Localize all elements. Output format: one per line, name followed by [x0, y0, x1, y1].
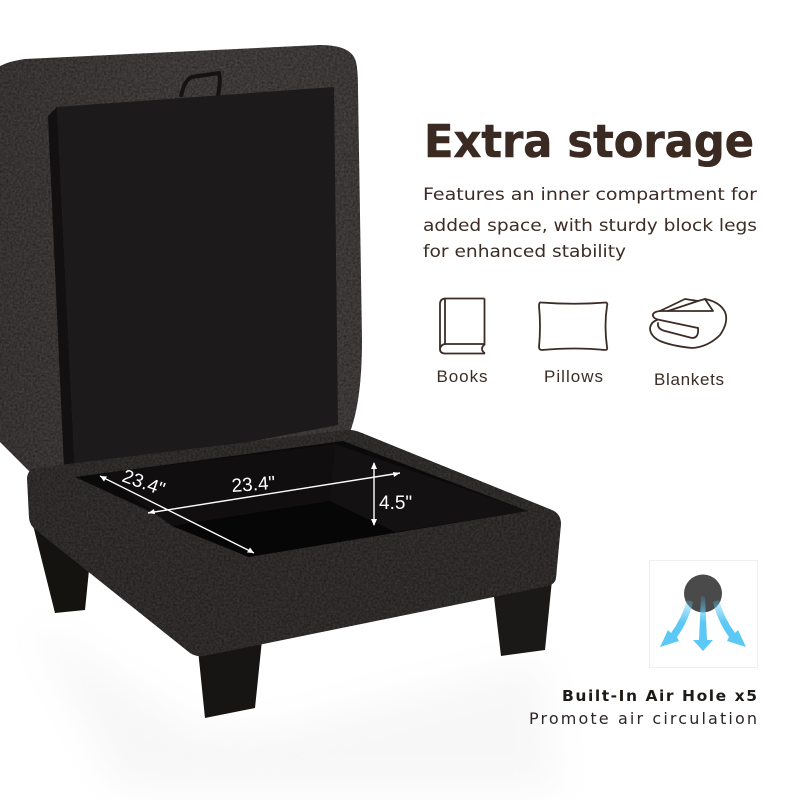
lid inner panel side strip [48, 107, 75, 475]
air hole caption heading: Built-In Air Hole x5 [562, 687, 757, 705]
icon: blanket [650, 299, 726, 348]
lid [0, 45, 362, 472]
dimension: width label: 23.4" [119, 466, 168, 501]
air hole caption text: Promote air circulation [529, 709, 757, 728]
airflow arrows [660, 596, 746, 651]
air hole circle [684, 574, 722, 612]
description: added space, with sturdy block legs [423, 216, 757, 236]
label: blankets: Blankets [654, 370, 724, 389]
icon: book [440, 298, 485, 354]
back-right leg [492, 570, 553, 656]
dimension: width arrow [100, 476, 254, 553]
storage opening [75, 441, 528, 557]
lid inner panel [57, 87, 338, 475]
description [423, 185, 757, 262]
description: for enhanced stability [423, 242, 626, 262]
ottoman base [27, 430, 561, 656]
floor reflection [30, 620, 560, 790]
title: Extra storage [424, 115, 754, 168]
icon: pillow [539, 302, 607, 350]
label: pillows: Pillows [544, 367, 603, 386]
back-left leg [33, 525, 90, 613]
label: books: Books [436, 367, 488, 386]
description: Features an inner compartment for [423, 185, 757, 205]
compartment floor [172, 501, 395, 557]
dimension: depth arrow [148, 472, 400, 514]
air hole panel [650, 560, 758, 668]
dimension: height label: 4.5" [379, 493, 412, 514]
back wall [100, 444, 335, 526]
ottoman product photo [0, 45, 561, 718]
lid handle [181, 73, 220, 97]
right wall [330, 444, 528, 532]
front leg [197, 640, 262, 718]
dimension: depth label: 23.4" [231, 473, 276, 497]
dimension: height arrow [371, 462, 377, 526]
